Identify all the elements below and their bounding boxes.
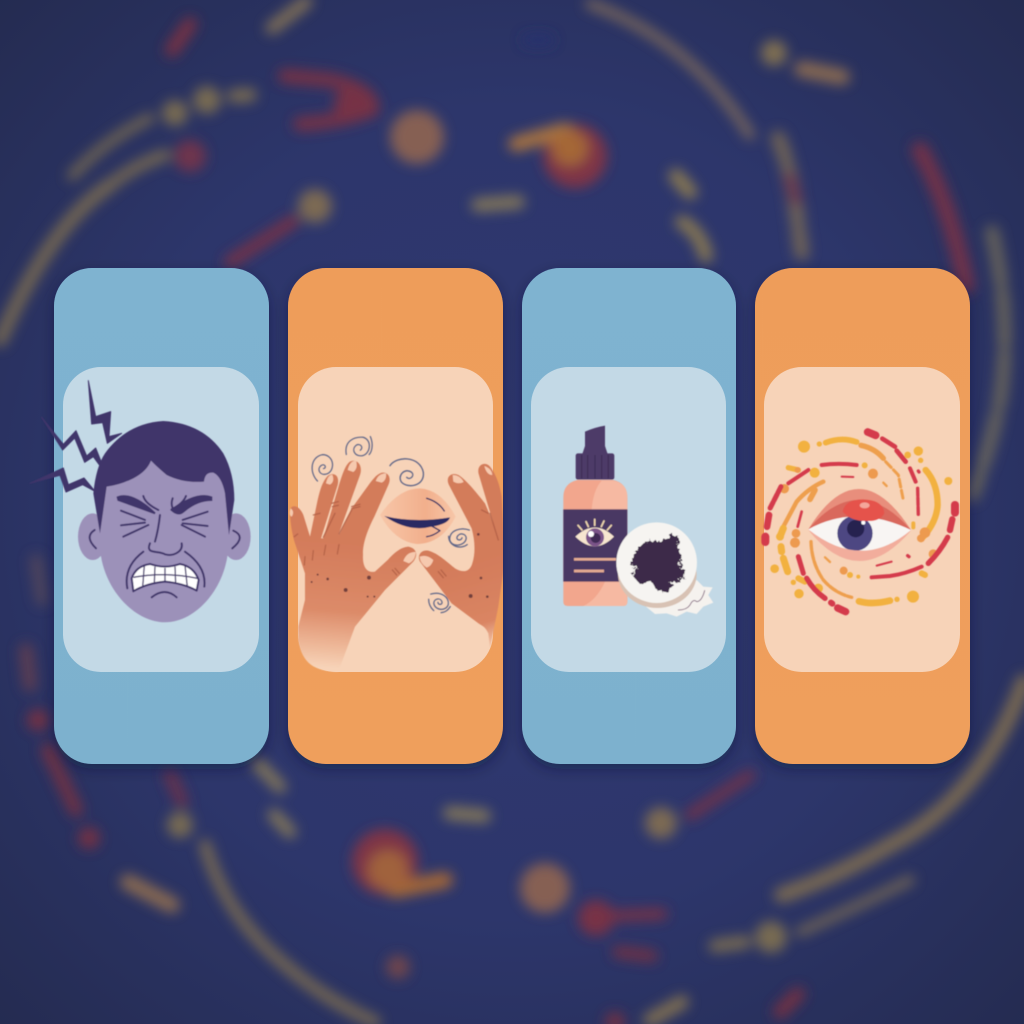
catchlight [861,521,865,525]
pump [582,426,608,454]
label [563,509,627,582]
panel: card 2 eye rubbing [288,268,505,764]
panel: card 3 eye drops and makeup removal [522,268,736,764]
lash line [384,516,450,528]
cheek folds [127,552,205,588]
ear folds [90,530,240,548]
card 2 background [288,268,503,764]
card 2 inner panel [298,367,493,672]
left squint lines [121,511,148,537]
spiral lower [429,593,450,613]
cotton pad [616,522,697,603]
head [100,457,228,622]
cap ridges [582,455,608,478]
eyelid [380,488,456,544]
knuckle creases and freckles [294,502,498,598]
fingernails [290,461,492,568]
card 3 background [522,268,736,764]
orange swirl dots [780,467,938,575]
amber swirl dashes [780,439,938,603]
freckles [311,533,489,598]
lashes [578,519,611,530]
left ear [78,513,107,560]
chin crease [152,592,177,597]
spiral upper left [312,455,333,481]
left hand [290,461,416,672]
icon: serum bottle and stained cotton pad [563,426,713,617]
iris and pupil [837,516,873,551]
left eyebrow [118,496,155,513]
facial lines [90,496,240,597]
hair [93,421,234,535]
teeth shape [132,564,199,591]
card 1 inner panel [63,367,259,672]
mascara smudge [630,535,687,593]
middle bolt [42,417,106,474]
bottle [563,426,627,606]
inner upper lid [808,500,911,530]
outer upper lid [808,489,911,530]
eye [808,489,911,561]
highlight [588,531,594,537]
label lines [574,559,616,571]
red swirl dashes [765,432,955,612]
panel: card 4 stye in swirling eye [755,268,970,764]
lower bolt [30,468,95,492]
right hand [419,464,505,648]
pupil [591,533,601,543]
right eyebrow [172,496,211,513]
spiral top [346,437,372,456]
icon: grimacing man with head pain [30,381,251,622]
iris [837,516,873,551]
brow wrinkles [143,496,186,510]
eye emblem [575,519,614,546]
nail tips [348,461,357,472]
cap [576,453,614,480]
large spiral over eye [390,459,423,486]
closed irritated eye [380,488,456,544]
squiggle [678,591,705,610]
creases [294,502,498,578]
body highlight [583,481,627,606]
eyelid creases [427,498,444,537]
lower rim [808,530,911,561]
amber swirl dots [770,441,952,603]
sclera [808,516,911,551]
torn tissue [646,580,713,617]
card 3 inner panel [531,367,726,672]
stye [843,499,884,521]
pad edge [618,540,697,608]
icon: hands rubbing an irritated eye [290,437,505,672]
card 4 inner panel [764,367,960,672]
clenched teeth [132,564,199,591]
lightning bolts [30,381,122,492]
spiral by eye corner [449,529,469,547]
card 4 background [755,268,970,764]
panel: card 1 headache [30,268,269,764]
right ear [221,513,251,560]
right squint lines [182,512,208,537]
pupil [847,520,864,537]
top bolt [88,381,122,443]
sclera [575,527,614,546]
icon: red eye with stye and spiral dashes [765,432,955,612]
stye highlight [860,502,870,508]
teeth gaps [133,565,197,587]
dizzy spirals [312,437,469,613]
card 1 background [54,268,269,764]
body [563,480,627,606]
nose [149,515,182,555]
iris [586,528,604,546]
